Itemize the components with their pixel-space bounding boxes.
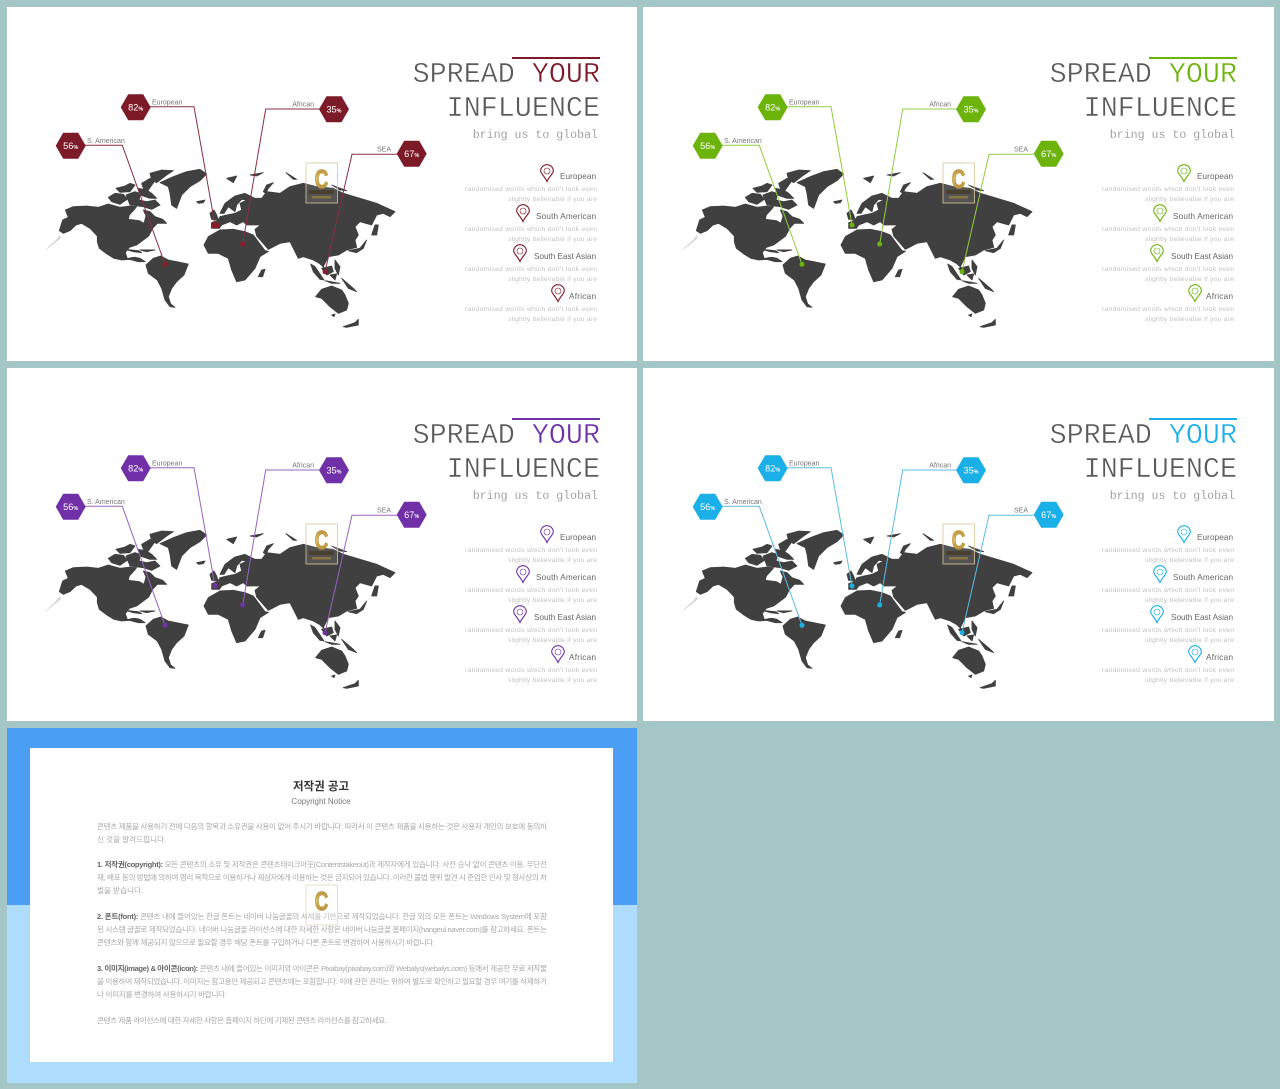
callout: south american: S. American [724,499,762,506]
watermark logo [943,163,974,203]
list: regions: randomised words which don't look even [1102,226,1234,233]
callout: european: European [152,100,182,106]
list: regions: slightly believable if you are [508,597,597,604]
callout: african: 35% [326,466,342,476]
list: regions: South American [1173,212,1233,221]
text block: introduction: 신 것을 알려드립니다. [97,834,166,844]
text block: image and icon [97,963,547,999]
callout: european [758,455,854,588]
title: spread your influence: INFLUENCE [447,92,600,125]
watermark logo: C [315,886,328,916]
callout: south american: 56% [63,141,78,151]
callout: sea [960,141,1064,274]
callout: south american: 56% [700,502,715,512]
callout: south american [693,494,804,628]
list: regions: randomised words which don't look even [1102,587,1234,594]
title: spread your influence: bring us to global [1110,490,1235,503]
world map [680,530,1032,688]
title: spread your influence: SPREAD YOUR [413,58,600,91]
list: regions: randomised words which don't look even [465,226,597,233]
title: spread your influence [413,57,600,142]
callout: south american: 56% [63,502,78,512]
list: regions: South American [536,212,596,221]
text block: copyright: 벌을 받습니다. [97,885,143,895]
title: spread your influence: bring us to global [473,129,598,142]
list: regions: slightly believable if you are [508,557,597,564]
world map [43,530,395,688]
callout: european [121,455,218,588]
list: regions: randomised words which don't look even [1102,186,1234,193]
text block: image and icon: 나 이미지를 변경하여 사용하시기 바랍니다. [97,989,227,999]
callout: sea: 67% [1041,149,1056,159]
world map [680,169,1032,327]
list: regions: slightly believable if you are [508,276,597,283]
title: spread your influence: bring us to global [473,490,598,503]
callout: european: 82% [765,464,780,474]
title: spread your influence: bring us to global [1110,129,1235,142]
list: regions: randomised words which don't look even [465,627,597,634]
callout: sea: SEA [377,508,391,514]
list: regions [1102,165,1234,323]
callout: sea: 67% [404,149,419,159]
callout: south american: S. American [724,138,762,145]
list: regions: randomised words which don't look even [1102,547,1234,554]
panel: maroon slide [7,7,637,361]
callout: european: European [789,100,819,106]
list: regions: South American [1173,573,1233,582]
list: regions: South American [536,573,596,582]
list: regions: slightly believable if you are [1145,236,1234,243]
list: regions: South East Asian [1171,613,1233,622]
callout: african [240,96,349,246]
watermark logo: C [315,164,328,194]
callout: sea [322,502,427,635]
list: regions: African [569,653,596,662]
watermark logo [306,885,338,925]
list: regions: randomised words which don't look even [1102,627,1234,634]
list: regions: South East Asian [534,252,596,261]
heading: copyright notice [291,779,351,806]
callout: south american: 56% [700,141,715,151]
callout: african: 35% [326,104,342,114]
list: regions: randomised words which don't look even [465,587,597,594]
callout: european: European [789,460,819,468]
list: regions: slightly believable if you are [508,196,597,203]
watermark logo [306,524,338,564]
title: spread your influence: SPREAD YOUR [413,419,600,452]
list: regions: European [1197,533,1233,542]
callout: african: 35% [963,104,979,114]
callout: african [240,457,349,608]
list: regions: slightly believable if you are [508,637,597,644]
list: regions: African [569,292,596,301]
text block: image and icon: 을 이용하여 제작되었습니다. 이미지는 참고용만 제공되고 콘텐츠에는 포함합니다. 이에 관한 권리는 위하여 별도로 확인하고 필요할 경우 여기를 삭제하거 [97,976,547,986]
heading: copyright notice: Copyright Notice [291,797,351,806]
callout: south american [693,133,804,267]
title: spread your influence: SPREAD YOUR [1050,419,1237,452]
callout: african: African [292,102,314,108]
title: spread your influence [1050,57,1237,142]
callout: european: 82% [765,102,780,112]
callout: african: 35% [963,466,979,476]
title: spread your influence: INFLUENCE [1084,453,1237,486]
callout: european: 82% [128,102,143,112]
list: regions: slightly believable if you are [1145,597,1234,604]
callout: sea: 67% [404,510,419,520]
callout: south american: S. American [87,499,125,506]
watermark logo [943,524,974,564]
text block: license note: 콘텐츠 제품 라이선스에 대한 자세한 사항은 홈페이지 하단에 기재된 콘텐츠 라이선스를 참고하세요. [97,1015,387,1025]
text block: copyright: 1. 저작권(copyright): 모든 콘텐츠의 소유 및 저작권은 콘텐츠테이크아웃(Contentstakeout)과 제작자에게 있습니다. 사전 승낙 없이 콘텐츠 이용, 무단전 [97,859,547,869]
list: regions: slightly believable if you are [1145,276,1234,283]
text block: font: 2. 폰트(font): 콘텐츠 내에 들어있는 한글 폰트는 네이버 나눔글꼴의 서체를 기반으로 제작되었습니다. 한글 외의 모든 폰트는 Windows System에 포함 [97,911,547,921]
list: regions [1102,526,1234,684]
text block: font [97,911,547,947]
panel: green slide [643,7,1274,361]
callout: sea [322,141,427,274]
list: regions: randomised words which don't look even [465,667,597,674]
list: regions: European [560,172,596,181]
list: regions: slightly believable if you are [1145,677,1234,684]
callout: sea: SEA [377,146,391,154]
list: regions: randomised words which don't look even [465,266,597,273]
list: regions: randomised words which don't look even [465,547,597,554]
title: spread your influence: INFLUENCE [1084,92,1237,125]
list: regions [465,526,597,684]
list: regions: South East Asian [1171,252,1233,261]
text block: font: 콘텐츠와 함께 제공되지 않으므로 필요할 경우 해당 폰트를 구입하거나 다른 폰트로 변경하여 사용하시기 바랍니다. [97,937,435,947]
world map [43,169,395,327]
callout: european: 82% [128,464,143,474]
list: regions: slightly believable if you are [1145,637,1234,644]
callout: african [877,96,986,246]
watermark logo: C [952,525,965,555]
callout: south american: S. American [87,138,125,145]
list: regions: slightly believable if you are [1145,557,1234,564]
list: regions: randomised words which don't look even [465,186,597,193]
list: regions: slightly believable if you are [508,236,597,243]
callout: sea: SEA [1014,146,1028,154]
callout: european [758,94,854,228]
text block: introduction [97,821,547,844]
text block: image and icon: 3. 이미지(image) & 아이콘(icon): 콘텐츠 내에 들어있는 이미지와 아이콘은 Pixabay(pixabay.com)와 Webalys(webalys.com) 등에서 제공한 무료 저작물 [97,963,547,973]
panel: copyright notice [7,728,637,1083]
text block: introduction: 콘텐츠 제품을 사용하기 전에 다음의 항목과 소유권을 사용이 없어 주시기 바랍니다. 따라서 이 콘텐츠 제품을 사용하는 것은 사용자 개인의 보호에 동의하 [97,821,547,831]
watermark logo [306,163,338,203]
title: spread your influence: SPREAD YOUR [1050,58,1237,91]
watermark logo: C [952,164,965,194]
callout: south american [56,133,168,267]
list: regions: South East Asian [534,613,596,622]
callout: sea: SEA [1014,508,1028,514]
list: regions: randomised words which don't look even [1102,306,1234,313]
list: regions: slightly believable if you are [1145,196,1234,203]
title: spread your influence [1050,418,1237,503]
callout: european: European [152,460,182,468]
list: regions: European [1197,172,1233,181]
text block: copyright [97,859,547,895]
list: regions: slightly believable if you are [508,316,597,323]
callout: south american [56,494,168,628]
list: regions: European [560,533,596,542]
list: regions: slightly believable if you are [1145,316,1234,323]
watermark logo: C [315,525,328,555]
callout: sea: 67% [1041,510,1056,520]
text block: copyright: 재, 배포 등의 방법에 의하여 영리 목적으로 이용하거나 제삼자에게 이용하는 것은 금지되어 있습니다. 이러한 불법 행위 발견 시 준엄한 민사 및 형사상의 처 [97,872,547,882]
list: regions: African [1206,653,1233,662]
panel: purple slide [7,368,637,721]
heading: copyright notice: 저작권 공고 [293,779,349,793]
title: spread your influence [413,418,600,503]
list: regions: randomised words which don't look even [1102,266,1234,273]
title: spread your influence: INFLUENCE [447,453,600,486]
callout: european [121,94,219,228]
callout: african: African [292,462,314,470]
list: regions: randomised words which don't look even [1102,667,1234,674]
list: regions [465,165,597,323]
panel: blue slide [643,368,1274,721]
text block: font: 된 시스템 글꼴로 제작되었습니다. 네이버 나눔글꼴 라이선스에 대한 자세한 사항은 네이버 나눔글꼴 홈페이지(hangeul.naver.com)를 참고하세요. 폰트는 [97,924,547,934]
list: regions: African [1206,292,1233,301]
callout: african: African [929,462,951,470]
callout: african [877,457,986,608]
list: regions: randomised words which don't look even [465,306,597,313]
callout: african: African [929,102,951,108]
list: regions: slightly believable if you are [508,677,597,684]
callout: sea [960,502,1064,635]
